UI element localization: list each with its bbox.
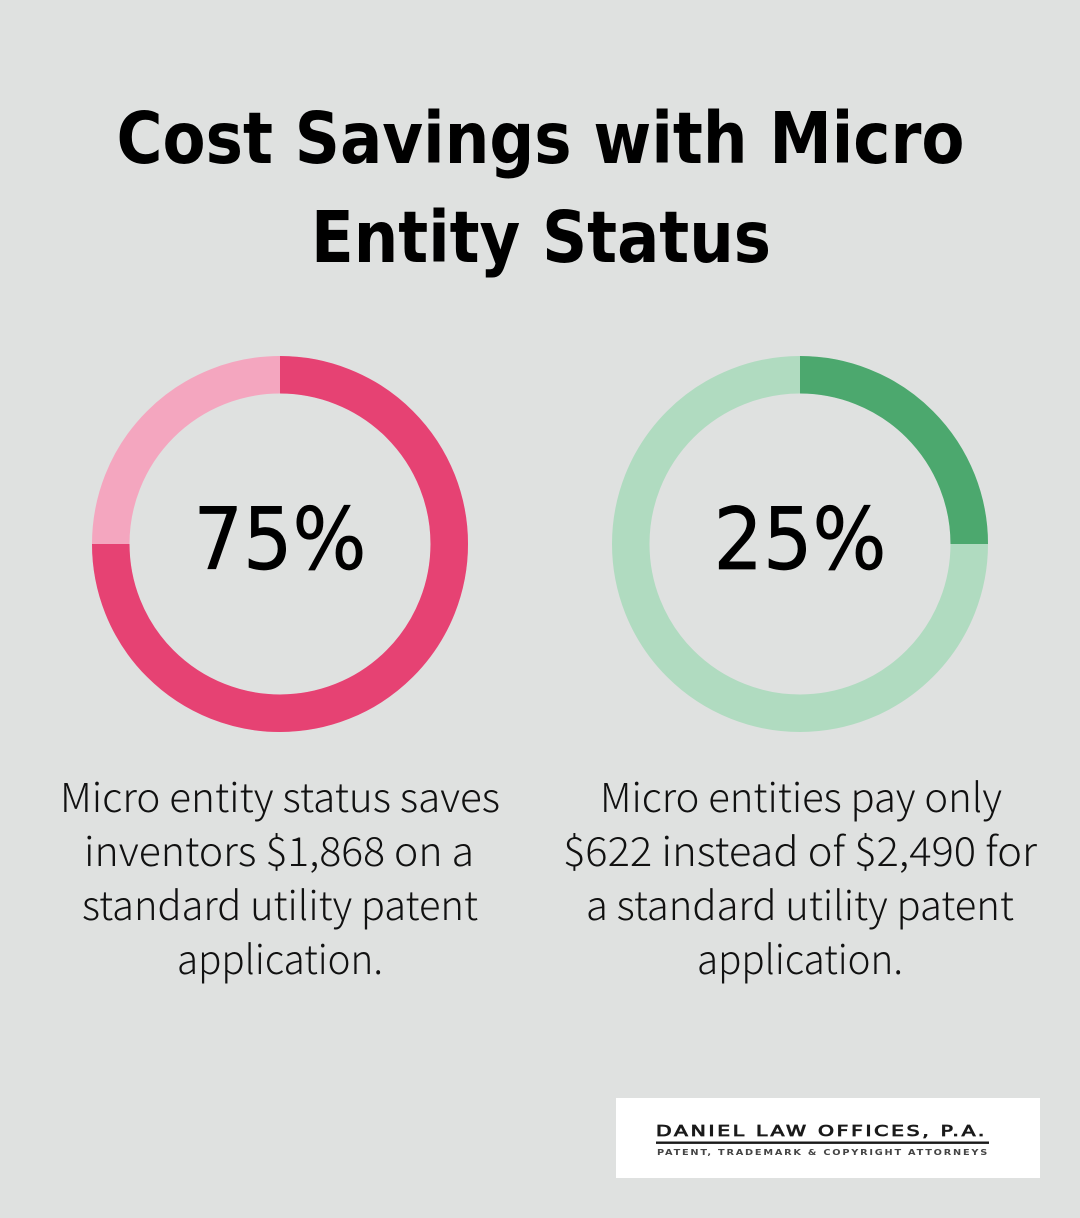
title xyxy=(116,97,964,279)
panel: 75% savings xyxy=(60,375,500,986)
text: cost description: Micro entities pay only xyxy=(600,766,1002,824)
title: Cost Savings with Micro xyxy=(116,97,964,180)
text: cost description: application. xyxy=(697,928,903,986)
donut chart: 25% xyxy=(631,375,969,713)
panel: 25% cost xyxy=(563,375,1038,986)
text: cost description: $622 instead of $2,490 for xyxy=(563,820,1038,878)
logo: Daniel Law Offices xyxy=(616,1098,1040,1178)
text: savings description: inventors $1,868 on a xyxy=(84,820,474,878)
text: cost description: a standard utility patent xyxy=(586,874,1014,932)
text: savings description xyxy=(60,766,500,986)
text: savings description: Micro entity status saves xyxy=(60,766,500,824)
donut chart: 75%: 75% xyxy=(194,490,366,590)
donut chart: 25%: 25% xyxy=(714,490,886,590)
text: savings description: application. xyxy=(177,928,383,986)
title: Entity Status xyxy=(311,196,771,279)
donut chart: 75% xyxy=(111,375,449,713)
text: savings description: standard utility patent xyxy=(82,874,478,932)
text: cost description xyxy=(563,766,1038,986)
logo: Daniel Law Offices: PATENT, TRADEMARK & COPYRIGHT ATTORNEYS xyxy=(657,1147,989,1157)
logo: Daniel Law Offices: DANIEL LAW OFFICES, P.A. xyxy=(656,1122,987,1140)
